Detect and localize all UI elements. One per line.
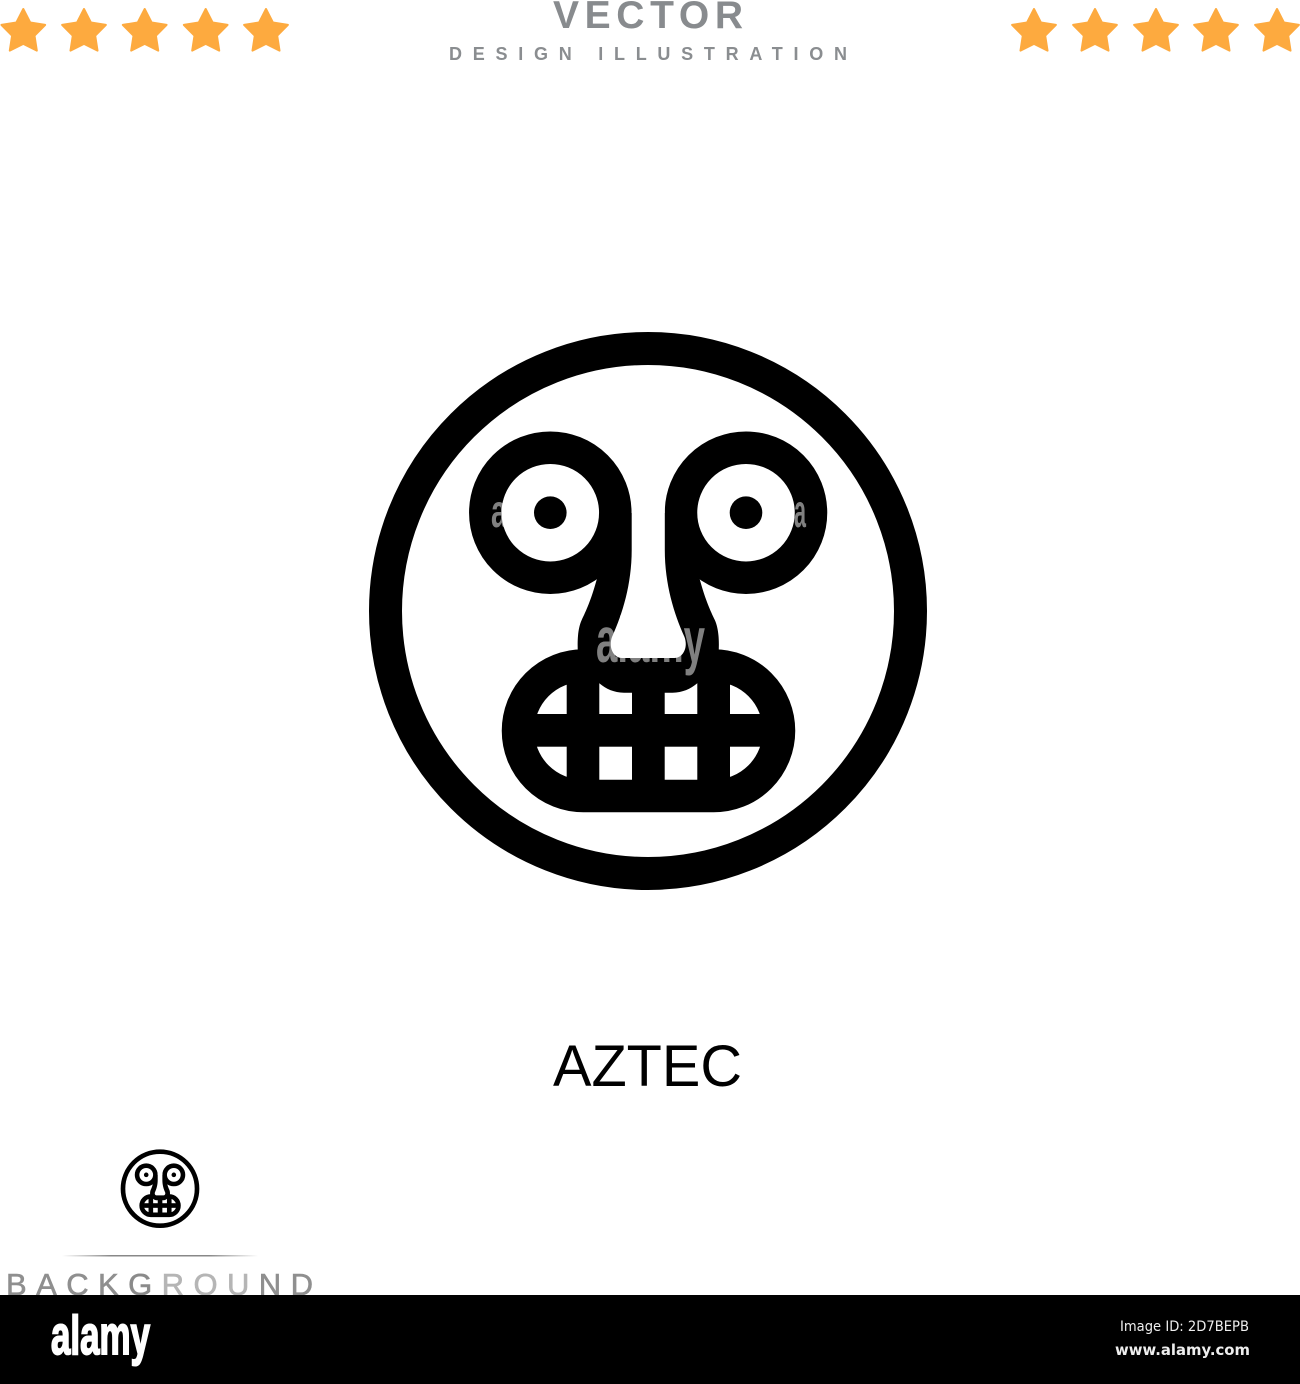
icon: aztec mask, main	[386, 348, 910, 874]
icon: aztec mask, small	[123, 1152, 197, 1226]
footer bar	[0, 1295, 1300, 1384]
left star rating	[1, 9, 288, 51]
website: www.alamy.com	[1115, 1341, 1250, 1359]
image id: Image ID: 2D7BEPB	[1120, 1319, 1249, 1335]
title: aztec: AZTEC	[553, 1034, 742, 1099]
text: a	[794, 485, 806, 537]
logo: alamy: alamy	[51, 1304, 150, 1366]
right star rating	[1012, 9, 1299, 51]
label: background: BACK G ROU ND	[6, 1267, 313, 1302]
watermark: left eye: a	[491, 485, 507, 537]
watermark: centre: alamy	[596, 604, 705, 676]
subheading: design illustration: DESIGN ILLUSTRATION	[449, 44, 847, 64]
divider line	[62, 1255, 258, 1256]
